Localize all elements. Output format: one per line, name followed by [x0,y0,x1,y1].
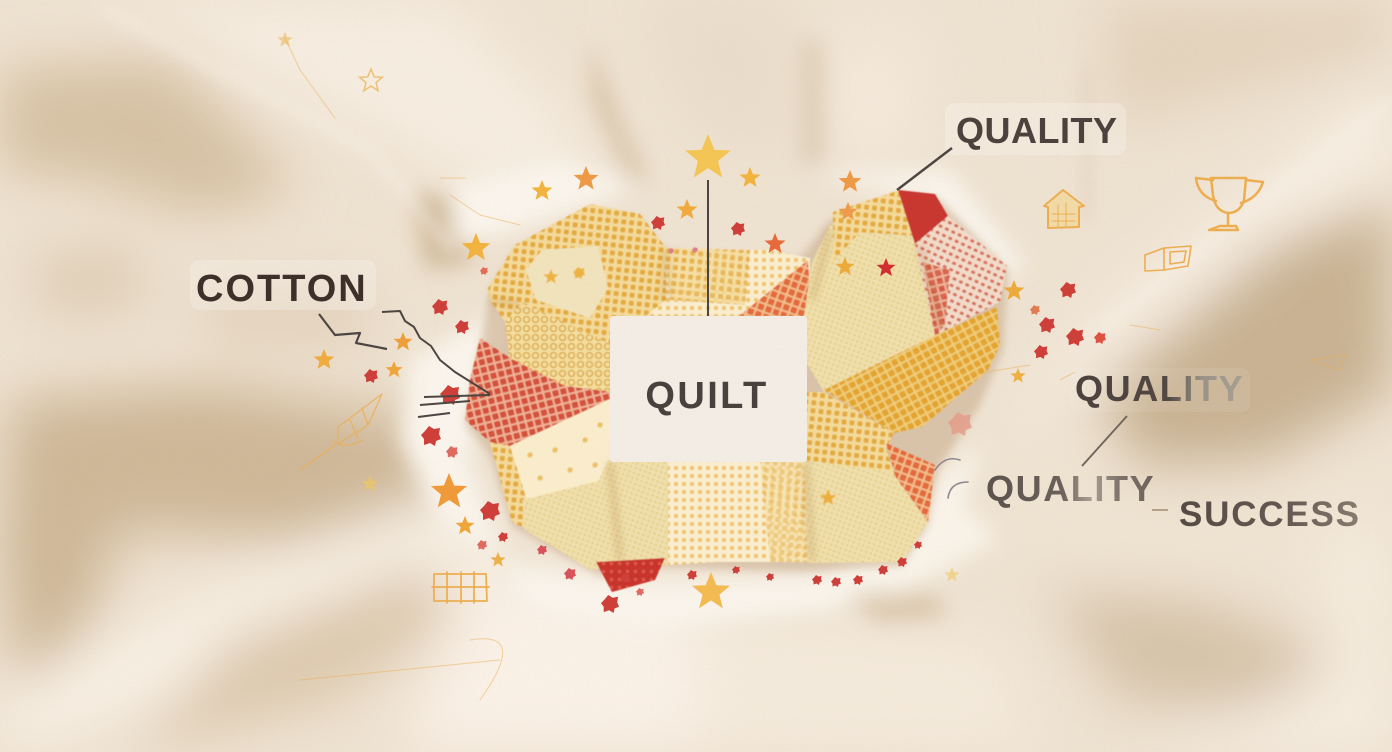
line drawn icons [285,38,1345,700]
quilt patches [465,190,1007,592]
patch: orange yellow right [824,307,1000,433]
icon: box [1145,246,1191,271]
central label: QUILT [610,316,807,462]
stars scattered around quilt [277,32,1026,608]
central label: QUILT: QUILT [645,375,769,417]
leader: quality to success [1152,509,1168,511]
patch: red top [898,190,948,244]
stitched squiggles by lower quilt [935,459,968,498]
leader: cotton zigzag [319,311,490,417]
patch: cream bottom left [522,478,612,570]
quilt patchwork [465,190,1008,592]
patch: yellow strip top right [833,190,916,262]
patch: top left yellow [488,204,666,345]
icon: left box [300,394,382,470]
patch: red left [465,338,612,448]
patch: mustard lace [505,302,612,392]
label: COTTON: COTTON [196,268,368,310]
quilt shadow [465,195,1008,576]
patch: cream bottom [590,460,670,568]
patch: orange triangle [739,260,812,316]
faint sketch lines [285,38,1345,700]
label: QUALITY lower: QUALITY [986,468,1155,509]
label: QUALITY middle: QUALITY [1075,368,1244,409]
patch: cream with stars [526,246,608,318]
leader: middle quality [1082,416,1127,466]
patch: yellow right of label [804,392,895,475]
patch: cream bottom right [804,460,928,563]
patch: yellow left edge [490,442,610,545]
star on cream patch [819,489,837,505]
leader: top quality [897,148,952,190]
patch: pink red [915,216,1007,336]
patch: red bottom [596,558,665,592]
pin line and top star [685,134,731,316]
patch: cream lower left [510,398,612,505]
stars on quilt [836,202,896,276]
patch: top yellow centre [615,248,810,316]
patch: yellow bottom centre [668,458,812,565]
red confetti blobs [364,216,1106,613]
patch stars [543,267,585,283]
patch: cream upper right [804,225,942,392]
label: QUALITY top: QUALITY [956,110,1118,151]
icon: house [1044,190,1084,228]
label: SUCCESS: SUCCESS [1179,495,1361,534]
quilt seam shading [490,230,942,560]
icon: trophy [1196,178,1263,230]
icon: bottom grid [432,572,489,603]
patch: red lower right [886,443,935,522]
